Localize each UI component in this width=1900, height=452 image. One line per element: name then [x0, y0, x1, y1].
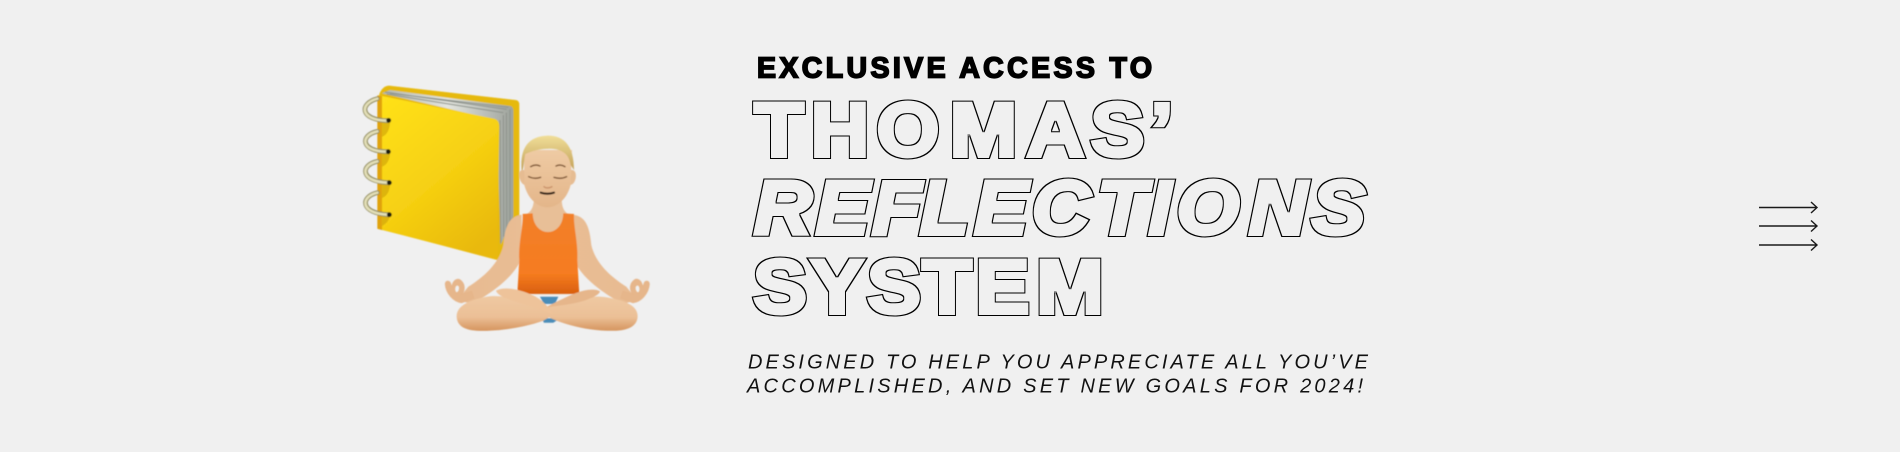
neck and chest — [525, 197, 570, 240]
hair — [521, 136, 574, 170]
subtitle line 2: ACCOMPLISHED, AND SET NEW GOALS FOR 2024! — [746, 376, 1363, 398]
left hand — [445, 279, 474, 303]
facial features — [529, 165, 567, 194]
subtitle — [746, 352, 1369, 398]
icon: meditating person — [445, 136, 649, 331]
ears — [519, 170, 576, 185]
icon: yellow spiral notebook — [365, 86, 519, 260]
title line 3: SYSTEM — [753, 244, 1104, 329]
icon: binder rings — [365, 99, 392, 217]
tank top — [517, 213, 579, 294]
title line 1: THOMAS’ — [754, 87, 1173, 172]
right hand — [621, 279, 649, 303]
illustration: notebook and meditating person — [365, 86, 649, 331]
right arm — [573, 215, 637, 304]
title line 2: REFLECTIONS — [754, 165, 1365, 250]
arrows — [1759, 202, 1817, 250]
feet — [546, 290, 600, 307]
shorts — [540, 297, 560, 323]
subtitle line 1: DESIGNED TO HELP YOU APPRECIATE ALL YOU’VE — [748, 352, 1369, 374]
legs — [537, 297, 638, 331]
eyebrow heading: EXCLUSIVE ACCESS TO — [757, 52, 1152, 84]
face — [524, 150, 572, 207]
ring shadows on cover — [382, 120, 390, 226]
left arm — [457, 215, 522, 304]
title: outlined — [753, 87, 1365, 329]
